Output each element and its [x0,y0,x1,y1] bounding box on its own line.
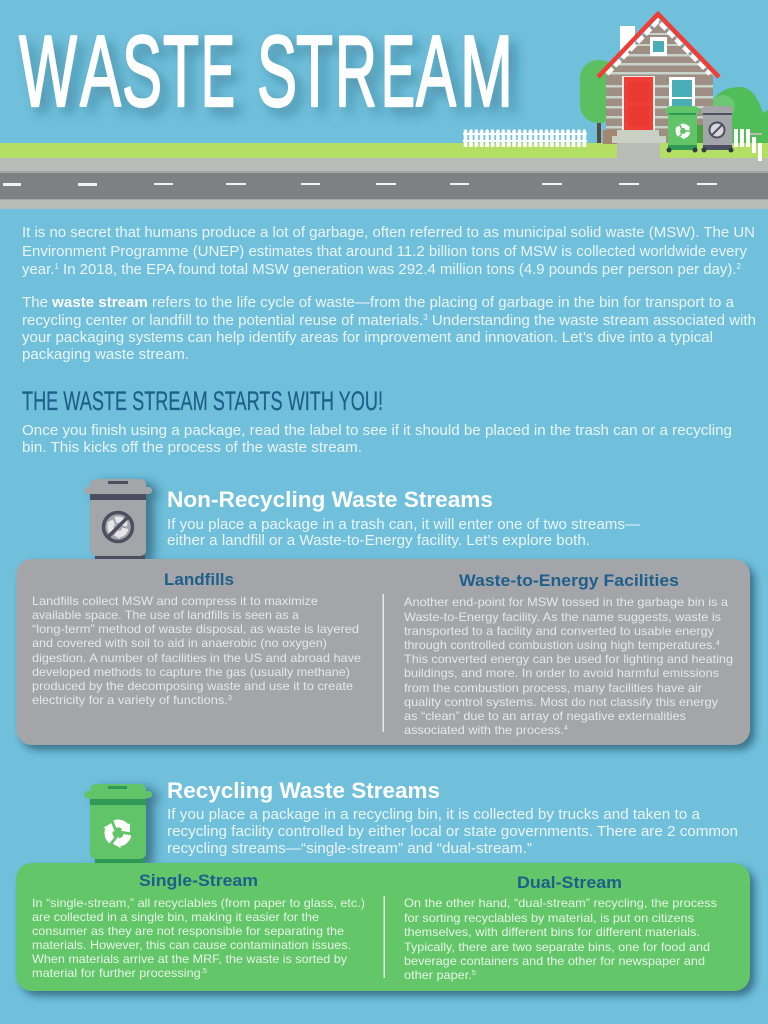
single-stream text: .5 [201,968,207,975]
recycling intro: recycling facility controlled by either local or state governments. There are 2 common [167,824,738,840]
waste-to-energy text: buildings, and more. In order to avoid harmful emissions [404,666,719,680]
landfills text: produced by the decomposing waste and use it to create [32,679,353,693]
intro paragraph 1: 2 [737,262,742,271]
title: A [416,16,456,128]
intro paragraph 2: The waste stream refers to the life cycle of waste—from the placing of garbage in the bin for transport to a [22,295,735,311]
title: R [335,16,377,128]
single-stream text: materials. However, this can cause contamination issues. [32,938,351,952]
waste-to-energy text: 4 [716,640,720,647]
picket fence right [734,129,762,161]
road dashes [3,183,717,186]
waste-to-energy text: quality control systems. Most do not classify this energy [404,695,718,709]
attic window [650,37,667,56]
siding stripes [606,33,713,128]
roof trim [607,21,710,74]
waste-to-energy text: from the combustion process, many facilities have air [404,681,702,695]
intro paragraph 1: year. [22,262,54,278]
title: E [201,16,235,128]
waste-to-energy text: Waste-to-Energy facility. As the name suggests, waste is [404,610,721,624]
single-stream text: are collected in a single bin, making it easier for the [32,910,319,924]
intro paragraph 2: Understanding the waste stream associated with [428,313,756,329]
icon: recycling bin [84,784,152,864]
intro paragraph 2: packaging waste stream. [22,347,189,363]
section intro text: Once you finish using a package, read the label to see if it should be placed in the trash can or a recycling [22,423,732,439]
landfills text: electricity for a variety of functions. [32,693,213,707]
street scene [0,143,768,209]
intro paragraph 1: Environment Programme (UNEP) estimates that around 11.2 billion tons of MSW is collected worldwide every [22,244,748,260]
waste-to-energy text: associated with the process. [404,723,552,737]
heading: landfills: Landfills [164,571,234,589]
waste-to-energy text: transported to a facility and converted to usable energy [404,624,714,638]
landfills text [32,594,361,707]
title: S [122,16,162,128]
single-stream text: When materials arrive at the MRF, the waste is sorted by [32,952,347,966]
heading: non-recycling: Non-Recycling Waste Streams [167,487,493,512]
dual-stream text [404,896,717,982]
non-recycling intro [167,517,640,549]
foundation and steps [603,130,623,144]
title: E [381,16,415,128]
grass strip [0,143,768,158]
walkway [617,143,660,158]
waste-to-energy text [404,595,733,737]
landfills text: Landfills collect MSW and compress it to maximize [32,594,318,608]
landfills text: available space. The use of landfills is seen as a [32,608,299,622]
title: A [80,16,121,128]
panel: recycling [16,863,750,991]
single-stream text: consumer as they are not responsible for separating the [32,924,344,938]
waste-to-energy text: as “clean” due to an array of negative externalities [404,709,686,723]
intro paragraph 1 [22,225,755,278]
dual-stream text: beverage containers and the other for newspaper and [404,954,705,968]
dual-stream text: themselves, with different bins for different materials. [404,925,700,939]
waste-to-energy text: Another end-point for MSW tossed in the garbage bin is a [404,595,728,609]
curb [0,200,768,209]
tree left [580,60,618,143]
dual-stream text: 5 [472,970,476,977]
landfills text: developed methods to capture the gas (usually methane) [32,665,350,679]
pavement [0,158,768,171]
small trash bin [701,106,734,152]
house window [669,77,695,111]
intro paragraph 2: recycling center or landfill to the potential reuse of materials. [22,313,416,329]
landfills text: “long-term” method of waste disposal, as waste is layered [32,622,359,636]
waste-to-energy text: This converted energy can be used for lighting and heating [404,652,733,666]
title: S [257,16,297,128]
title: T [163,16,199,128]
intro paragraph 2 [22,295,756,363]
intro paragraph 2: your packaging systems can help identify areas for improvement and innovation. Let’s dive into a typical [22,330,713,346]
chimney [620,26,635,52]
road [0,171,768,200]
tree right [711,87,768,143]
heading: waste-to-energy: Waste-to-Energy Facilities [459,572,679,590]
intro paragraph 2: 3 [423,313,428,322]
section heading: THE WASTE STREAM STARTS WITH YOU! [22,386,383,416]
non-recycling intro: either a landfill or a Waste-to-Energy facility. Let’s explore both. [167,533,590,549]
landfills text: digestion. A number of facilities in the US and abroad have [32,651,361,665]
door [622,76,655,131]
section intro text: bin. This kicks off the process of the waste stream. [22,440,362,456]
waste-to-energy text: through controlled combustion using high temperatures. [404,638,695,652]
icon: trash bin [84,479,152,561]
waste-to-energy text: 4 [564,725,568,732]
dual-stream text: On the other hand, “dual-stream” recycling, the process [404,896,717,910]
small recycling bin [665,106,700,152]
recycling intro: If you place a package in a recycling bin, it is collected by trucks and taken to a [167,807,701,823]
recycling intro: recycling streams—“single-stream” and “dual-stream.” [167,841,532,857]
single-stream text: In “single-stream,” all recyclables (from paper to glass, etc.) [32,896,365,910]
dual-stream text: for sorting recyclables by material, is put on citizens [404,911,694,925]
title: M [460,16,513,128]
small bush [697,125,704,143]
house [598,14,719,158]
heading: recycling: Recycling Waste Streams [167,778,440,803]
heading: dual-stream: Dual-Stream [517,874,622,892]
panel: non-recycling [16,559,750,745]
single-stream text [32,896,365,980]
landfills text: and covered with soil to aid in anaerobic (no oxygen) [32,636,327,650]
walls [606,20,713,143]
intro paragraph 1: In 2018, the EPA found total MSW generation was 292.4 million tons (4.9 pounds per person per day). [59,262,737,278]
intro paragraph 1: It is no secret that humans produce a lot of garbage, often referred to as municipal solid waste (MSW). The UN [22,225,755,241]
single-stream text: material for further processing [32,966,189,980]
title: W [19,16,77,128]
title: T [296,16,333,128]
roof [598,14,719,77]
section intro text [22,423,732,456]
landfills text: 3 [228,695,232,702]
dual-stream text: Typically, there are two separate bins, one for food and [404,940,710,954]
picket fence left [463,129,587,147]
dual-stream text: other paper. [404,968,467,982]
recycling intro [167,807,738,857]
intro paragraph 1: 1 [54,262,59,271]
heading: single-stream: Single-Stream [139,872,258,890]
non-recycling intro: If you place a package in a trash can, it will enter one of two streams— [167,517,640,533]
